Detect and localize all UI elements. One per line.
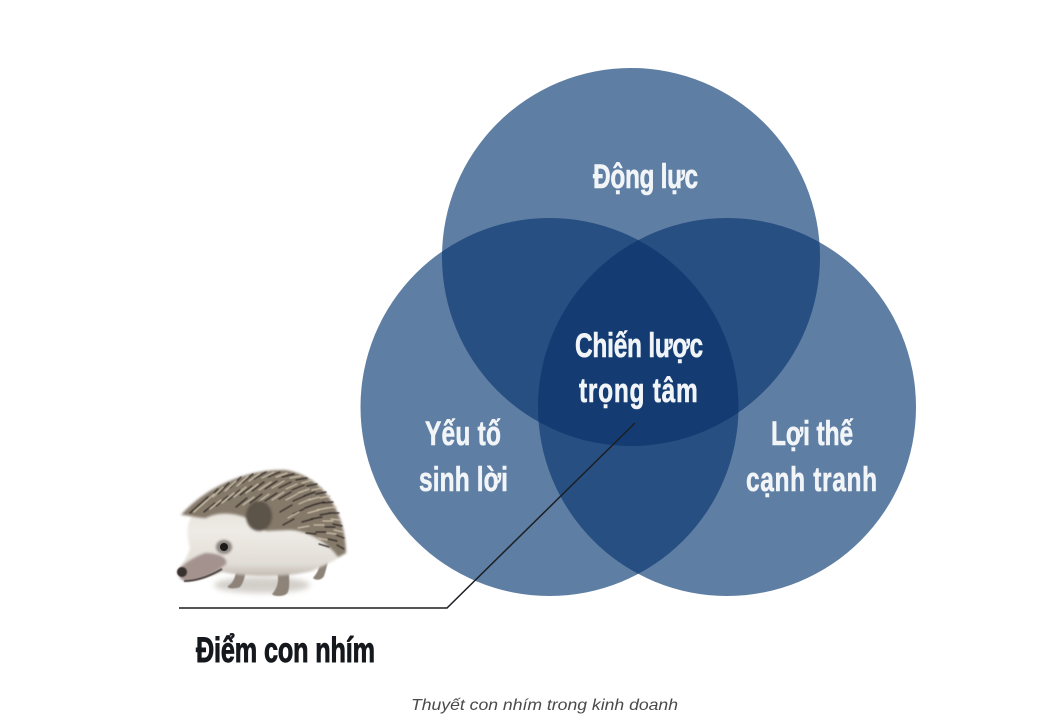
Venn diagram — [360, 68, 916, 596]
overlap: Động lực and Yếu tố sinh lời — [442, 218, 638, 422]
overlap: centre of all three circles — [538, 240, 738, 446]
circle: Lợi thế cạnh tranh — [538, 218, 916, 596]
label: Yếu tố sinh lời — [419, 415, 508, 499]
label: Lợi thế cạnh tranh: cạnh tranh — [746, 461, 877, 499]
circle: Yếu tố sinh lời — [360, 218, 738, 596]
label: Chiến lược trọng tâm: trọng tâm — [579, 372, 698, 410]
label: Yếu tố sinh lời: Yếu tố — [425, 415, 501, 453]
hedgehog Venn infographic — [176, 68, 916, 714]
label: Chiến lược trọng tâm: Chiến lược — [575, 327, 703, 365]
label: Điểm con nhím: Điểm con nhím — [196, 631, 375, 670]
callout leader line — [179, 423, 635, 608]
label: Động lực: Động lực — [593, 158, 698, 196]
overlap: Động lực and Lợi thế cạnh tranh — [638, 218, 820, 412]
label: Lợi thế cạnh tranh — [746, 415, 877, 499]
label: Yếu tố sinh lời: sinh lời — [419, 461, 508, 499]
caption: Thuyết con nhím trong kinh doanh — [411, 697, 678, 714]
overlap: Yếu tố sinh lời and Lợi thế cạnh tranh — [538, 412, 738, 574]
label: Chiến lược trọng tâm — [575, 327, 703, 410]
label: Lợi thế cạnh tranh: Lợi thế — [771, 415, 854, 453]
icon: hedgehog — [177, 470, 346, 596]
circle: Động lực — [442, 68, 820, 446]
